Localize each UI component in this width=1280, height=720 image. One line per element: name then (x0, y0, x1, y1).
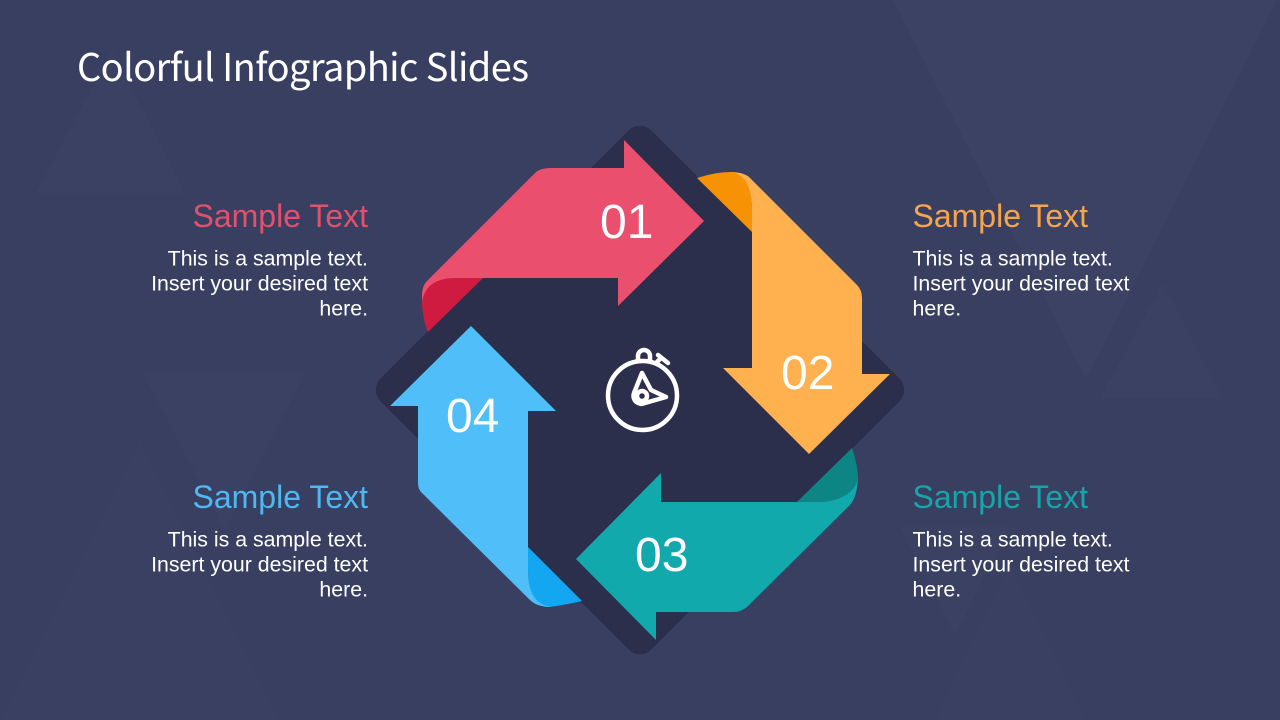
text block: top left: This is a sample text. (168, 246, 368, 270)
text block: bottom left: Insert your desired text (151, 552, 368, 576)
arrow 02: orange: 02 (781, 347, 834, 400)
text block: bottom right: Insert your desired text (912, 552, 1130, 576)
icon: stopwatch (608, 350, 677, 430)
arrow 03: teal: 03 (635, 529, 688, 582)
text block: top right: Sample Text (912, 198, 1088, 234)
text block: top left: Insert your desired text (151, 272, 368, 296)
text block: bottom right: here. (912, 578, 961, 602)
text block: top right: here. (912, 296, 961, 320)
text block: bottom right: Sample Text (912, 479, 1088, 515)
arrow 01: red (422, 140, 704, 332)
text block: top left: Sample Text (192, 198, 368, 234)
text block: bottom left: This is a sample text. (168, 528, 368, 552)
central dark diamond (369, 119, 911, 661)
text block: bottom left: here. (319, 578, 368, 602)
arrow 04: blue (390, 326, 582, 607)
arrow 03: teal (576, 448, 858, 640)
text block: bottom left: Sample Text (192, 479, 368, 515)
text block: bottom right: This is a sample text. (912, 528, 1113, 552)
title: Colorful Infographic Slides (77, 37, 529, 92)
text block: bottom right (912, 479, 1130, 602)
arrow 01: red: 01 (600, 196, 653, 249)
text block: top right (912, 198, 1130, 320)
text block: top right: Insert your desired text (912, 272, 1130, 296)
text block: top left (151, 198, 368, 320)
arrow 02: orange (697, 172, 890, 454)
text block: top left: here. (319, 296, 368, 320)
text block: top right: This is a sample text. (912, 246, 1113, 270)
text block: bottom left (151, 479, 368, 602)
arrow 04: blue: 04 (446, 390, 499, 443)
